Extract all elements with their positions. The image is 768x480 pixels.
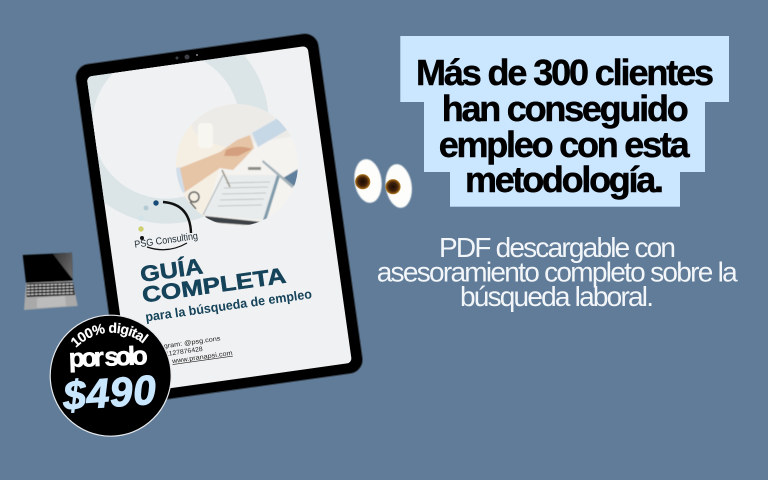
badge label: 100% digital [71,322,149,348]
tablet contact lines: +5491127876428 [150,346,204,360]
tablet title: COMPLETA [141,263,288,308]
desk paper [203,175,277,220]
badge: price [50,314,172,437]
description text: PDF descargable con [439,232,676,263]
tablet title [138,239,313,324]
heading highlight and text [400,36,729,207]
heading lines [416,52,714,200]
glasses [189,192,199,202]
infographic canvas [22,33,738,437]
badge por solo: por solo [68,340,148,373]
description text: asesoramiento completo sobre la [377,257,738,288]
tablet contact lines [148,334,233,368]
tablet title: GUÍA [139,253,205,287]
sleeves [252,118,287,147]
cup [198,123,213,148]
logo name: PSG Consulting [134,231,199,251]
tablet contact lines: www.pranapsi.com [171,350,233,365]
heading lines: Más de 300 clientes [416,52,714,93]
tablet contact lines: Instagram: @psg.cons [148,335,222,352]
heading lines: han conseguido [442,88,689,129]
icon: eyes [352,157,415,210]
tablet [75,33,363,400]
hands [180,135,254,192]
heading lines: empleo con esta [439,124,691,165]
badge price value: $490 [60,367,158,419]
icon: laptop [23,253,78,310]
camera dots [176,54,198,60]
photo: handshake [176,104,298,226]
tablet title: para la búsqueda de empleo [144,286,313,324]
tablet body and screen [75,33,363,400]
laptop corner [283,169,298,186]
description text: búsqueda laboral. [460,281,654,312]
logo marks [138,200,191,250]
heading lines: metodología. [465,159,664,200]
description text [377,232,738,312]
